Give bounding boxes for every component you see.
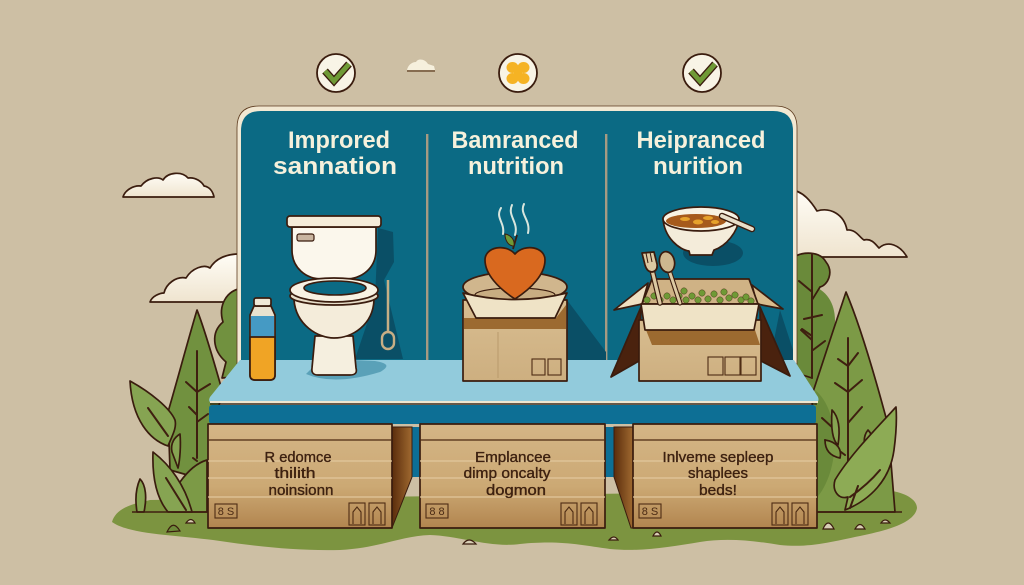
cloud: upper left — [123, 173, 214, 197]
ground — [112, 490, 917, 550]
box: right: beds! — [699, 483, 737, 499]
gap behind boxes — [412, 427, 421, 477]
box: left: noinsionn — [268, 483, 334, 499]
heading: column 2 — [452, 127, 578, 180]
icon: heart box — [463, 234, 567, 381]
cloud: small top — [407, 60, 435, 71]
box: right: shaplees — [688, 466, 748, 482]
icon: check 1 — [317, 54, 355, 92]
icon: steam — [499, 204, 528, 235]
box: right: 8 S — [642, 506, 658, 518]
box shadow: heart box — [567, 300, 606, 360]
icon: bottle — [250, 298, 275, 380]
icon: spoon — [657, 250, 680, 303]
plants: right tree — [812, 292, 895, 512]
box: middle: Emplancee — [475, 450, 551, 466]
gap behind right box — [605, 427, 615, 477]
divider: right — [605, 134, 607, 360]
icon: food box — [611, 279, 790, 381]
heading: column 1: sannation — [273, 153, 397, 180]
box: middle: 8 8 — [429, 506, 445, 518]
box: right: Inlveme sepleep — [662, 450, 774, 466]
plants: back right bush — [792, 253, 835, 390]
icon: fork — [642, 252, 660, 303]
plants: right foreground leaves — [817, 407, 902, 512]
divider: left — [426, 134, 428, 360]
box: left: thilith — [274, 466, 316, 482]
table top — [209, 360, 819, 403]
shadow: food box — [770, 310, 793, 360]
heading: column 1 — [273, 127, 397, 180]
icon: toilet brush — [382, 280, 394, 349]
plants: left foreground leaves — [130, 381, 207, 512]
icon: toilet — [287, 216, 386, 380]
heading: column 1: Improred — [288, 127, 390, 154]
heading: column 3: Heipranced — [636, 127, 766, 154]
rocks — [167, 520, 890, 544]
heading: column 2: Bamranced — [452, 127, 578, 154]
box: left: R edomce — [264, 450, 332, 466]
icon: check 2 — [683, 54, 721, 92]
table front edge — [209, 402, 818, 424]
plants: left tree — [168, 310, 222, 480]
icon: soup bowl — [663, 207, 752, 266]
box: middle — [420, 424, 605, 528]
box: middle: dogmon — [486, 483, 546, 499]
heading: column 2: nutrition — [468, 153, 564, 180]
icon: yellow clover — [499, 54, 537, 92]
box: right — [614, 424, 817, 528]
box: left: 8 S — [218, 506, 234, 518]
heading: column 3 — [636, 127, 766, 180]
panel: teal board — [237, 106, 797, 364]
box: middle: dimp oncalty — [464, 466, 551, 482]
toilet shadow — [355, 228, 403, 359]
cloud: lower left — [150, 254, 245, 302]
plants: back left bush — [215, 288, 243, 378]
box: left — [208, 424, 412, 528]
cloud: right — [790, 190, 907, 257]
heading: column 3: nurition — [653, 153, 743, 180]
